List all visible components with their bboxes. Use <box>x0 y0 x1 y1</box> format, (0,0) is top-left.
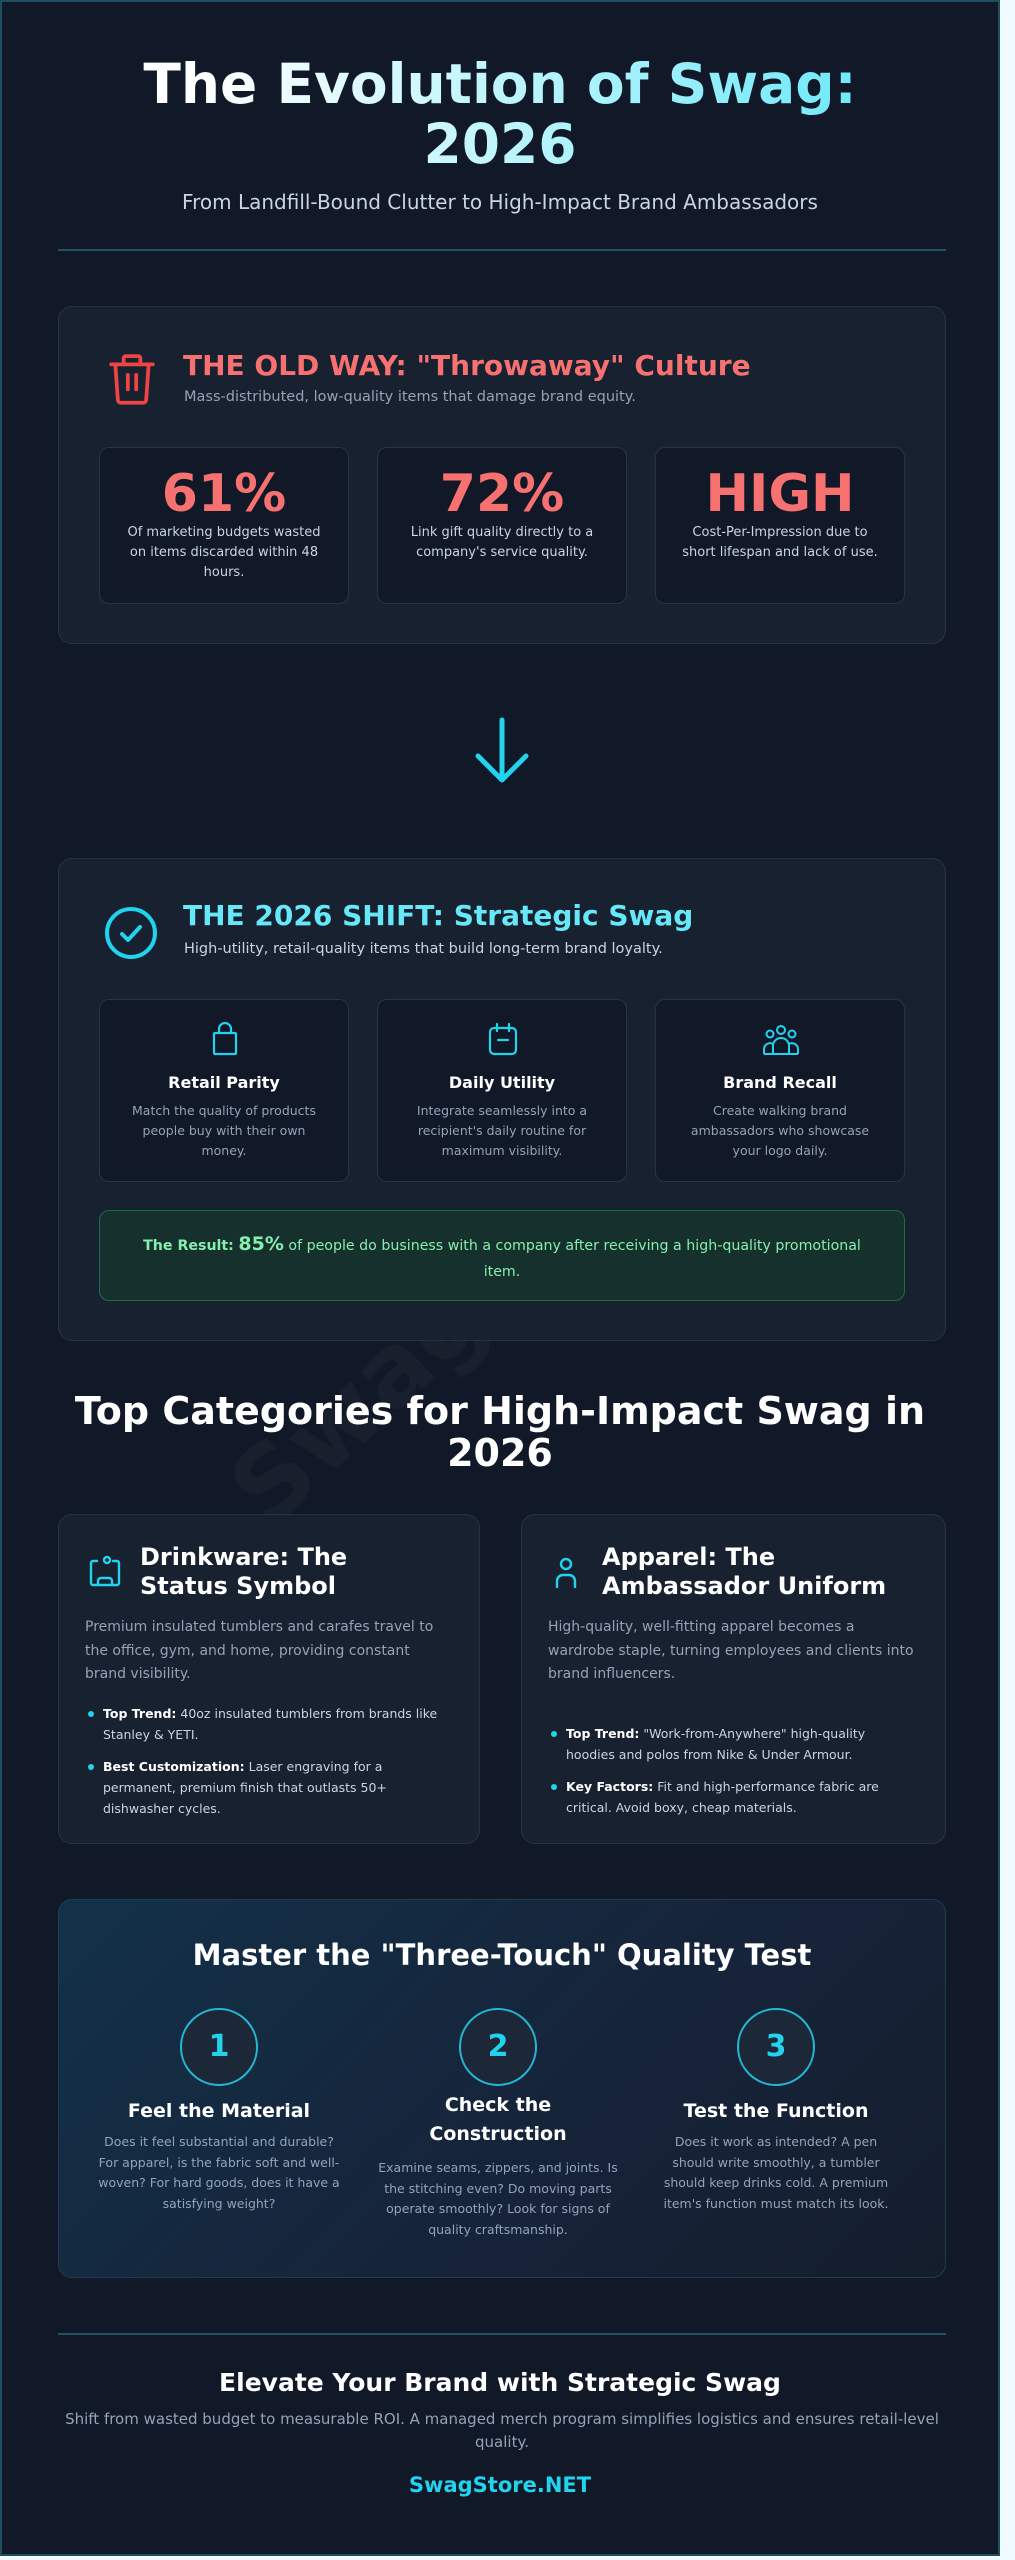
footer brand: SwagStore.NET <box>409 2473 591 2497</box>
bullet list: Top Trend: 40oz insulated tumblers from brands like Stanley & YETI. <box>103 1706 437 1742</box>
stat card 72% <box>377 447 627 604</box>
title: drinkware: Drinkware: The <box>140 1543 347 1571</box>
title: drinkware <box>140 1543 347 1600</box>
stat card HIGH: Cost-Per-Impression due to short lifespan and lack of use. <box>682 525 878 560</box>
stat card 61% <box>99 447 349 604</box>
heading: top categories: Top Categories for High-Impact Swag in <box>75 1389 925 1433</box>
title: 2026 <box>423 112 577 176</box>
stat card 61%: Of marketing budgets wasted on items discarded within 48 hours. <box>127 525 321 580</box>
heading: shift: THE 2026 SHIFT: Strategic Swag <box>183 899 693 932</box>
icon: bag <box>212 1022 238 1056</box>
title: apparel: Apparel: The <box>602 1543 775 1571</box>
card: daily utility <box>377 999 627 1182</box>
title <box>2 54 998 174</box>
title: apparel: Ambassador Uniform <box>602 1572 886 1600</box>
panel: old way <box>58 306 946 644</box>
title: drinkware: Status Symbol <box>140 1572 336 1600</box>
title: three-touch: Master the "Three-Touch" Quality Test <box>193 1938 811 1972</box>
step 2: Construction <box>429 2123 567 2145</box>
bullet list <box>88 1706 437 1816</box>
bullet list: Key Factors: Fit and high-performance fabric are critical. Avoid boxy, cheap materials. <box>566 1779 879 1815</box>
panel: three-touch test <box>58 1899 946 2278</box>
card: retail parity: Match the quality of products people buy with their own money. <box>132 1103 316 1158</box>
step 2: Check the <box>445 2094 551 2116</box>
step 3 <box>663 2008 889 2210</box>
card: brand recall: Create walking brand ambassadors who showcase your logo daily. <box>691 1103 869 1158</box>
heading: top categories <box>75 1389 925 1475</box>
card: daily utility: Daily Utility <box>449 1073 555 1092</box>
subheading: High-utility, retail-quality items that build long-term brand loyalty. <box>184 941 663 957</box>
step 2: Examine seams, zippers, and joints. Is the stitching even? Do moving parts operate smoothly? Look for signs of quality craftsmanship. <box>378 2160 618 2236</box>
subheading: Mass-distributed, low-quality items that damage brand equity. <box>184 389 636 405</box>
heading: old way: THE OLD WAY: "Throwaway" Culture <box>183 349 751 382</box>
heading: top categories: 2026 <box>447 1431 553 1475</box>
card: daily utility: Integrate seamlessly into a recipient's daily routine for maximum visibility. <box>417 1103 587 1158</box>
card: retail parity: Retail Parity <box>168 1073 280 1092</box>
arrow down <box>476 718 528 782</box>
step 3: Test the Function <box>684 2100 868 2122</box>
stat card 72%: Link gift quality directly to a company's service quality. <box>411 525 593 560</box>
card: brand recall: Brand Recall <box>723 1073 837 1092</box>
step 1: Feel the Material <box>128 2100 310 2122</box>
bullet list: Top Trend: "Work-from-Anywhere" high-quality hoodies and polos from Nike & Under Armour. <box>566 1726 865 1762</box>
callout: result <box>99 1210 905 1301</box>
footer heading: Elevate Your Brand with Strategic Swag <box>219 2368 781 2397</box>
watermark: SwagStore.net <box>207 893 897 1548</box>
card: brand recall <box>655 999 905 1182</box>
icon: person <box>556 1558 576 1588</box>
icon: tumbler <box>90 1556 120 1586</box>
step 2 <box>378 2008 618 2236</box>
bullet list <box>551 1726 879 1815</box>
stat card HIGH: HIGH <box>705 464 855 524</box>
panel: drinkware <box>58 1514 480 1844</box>
footer text: Shift from wasted budget to measurable ROI. A managed merch program simplifies logistics and ensures retail-level quality. <box>65 2410 939 2451</box>
icon: people <box>763 1025 799 1055</box>
stat card 61%: 61% <box>162 464 286 524</box>
step 1 <box>98 2008 340 2210</box>
subtitle: From Landfill-Bound Clutter to High-Impact Brand Ambassadors <box>182 190 818 214</box>
step 1: 1 <box>209 2029 229 2064</box>
panel: apparel <box>521 1514 946 1844</box>
card: retail parity <box>99 999 349 1182</box>
panel: 2026 shift <box>58 858 946 1341</box>
text: apparel desc: High-quality, well-fitting apparel becomes a wardrobe staple, turning employees and clients into brand influencers. <box>548 1619 914 1682</box>
step 2: 2 <box>488 2029 508 2064</box>
stat card HIGH <box>655 447 905 604</box>
title: The Evolution of Swag: <box>143 52 857 116</box>
step 1: Does it feel substantial and durable? For apparel, is the fabric soft and well-woven? For hard goods, does it have a satisfying weight? <box>98 2134 340 2210</box>
text: drinkware desc: Premium insulated tumblers and carafes travel to the office, gym, and home, providing constant brand visibility. <box>85 1619 433 1682</box>
step 3: 3 <box>766 2029 786 2064</box>
icon: check circle <box>105 907 157 959</box>
stat card 72%: 72% <box>440 464 564 524</box>
step 3: Does it work as intended? A pen should write smoothly, a tumbler should keep drinks cold. A premium item's function must match its look. <box>663 2134 889 2210</box>
bullet list: Best Customization: Laser engraving for a permanent, premium finish that outlasts 50+ dishwasher cycles. <box>103 1759 387 1816</box>
icon: trash <box>109 354 155 405</box>
callout: result: The Result: 85% of people do business with a company after receiving a high-quality promotional item. <box>143 1233 861 1280</box>
icon: calendar <box>488 1022 518 1056</box>
title: apparel <box>602 1543 886 1600</box>
